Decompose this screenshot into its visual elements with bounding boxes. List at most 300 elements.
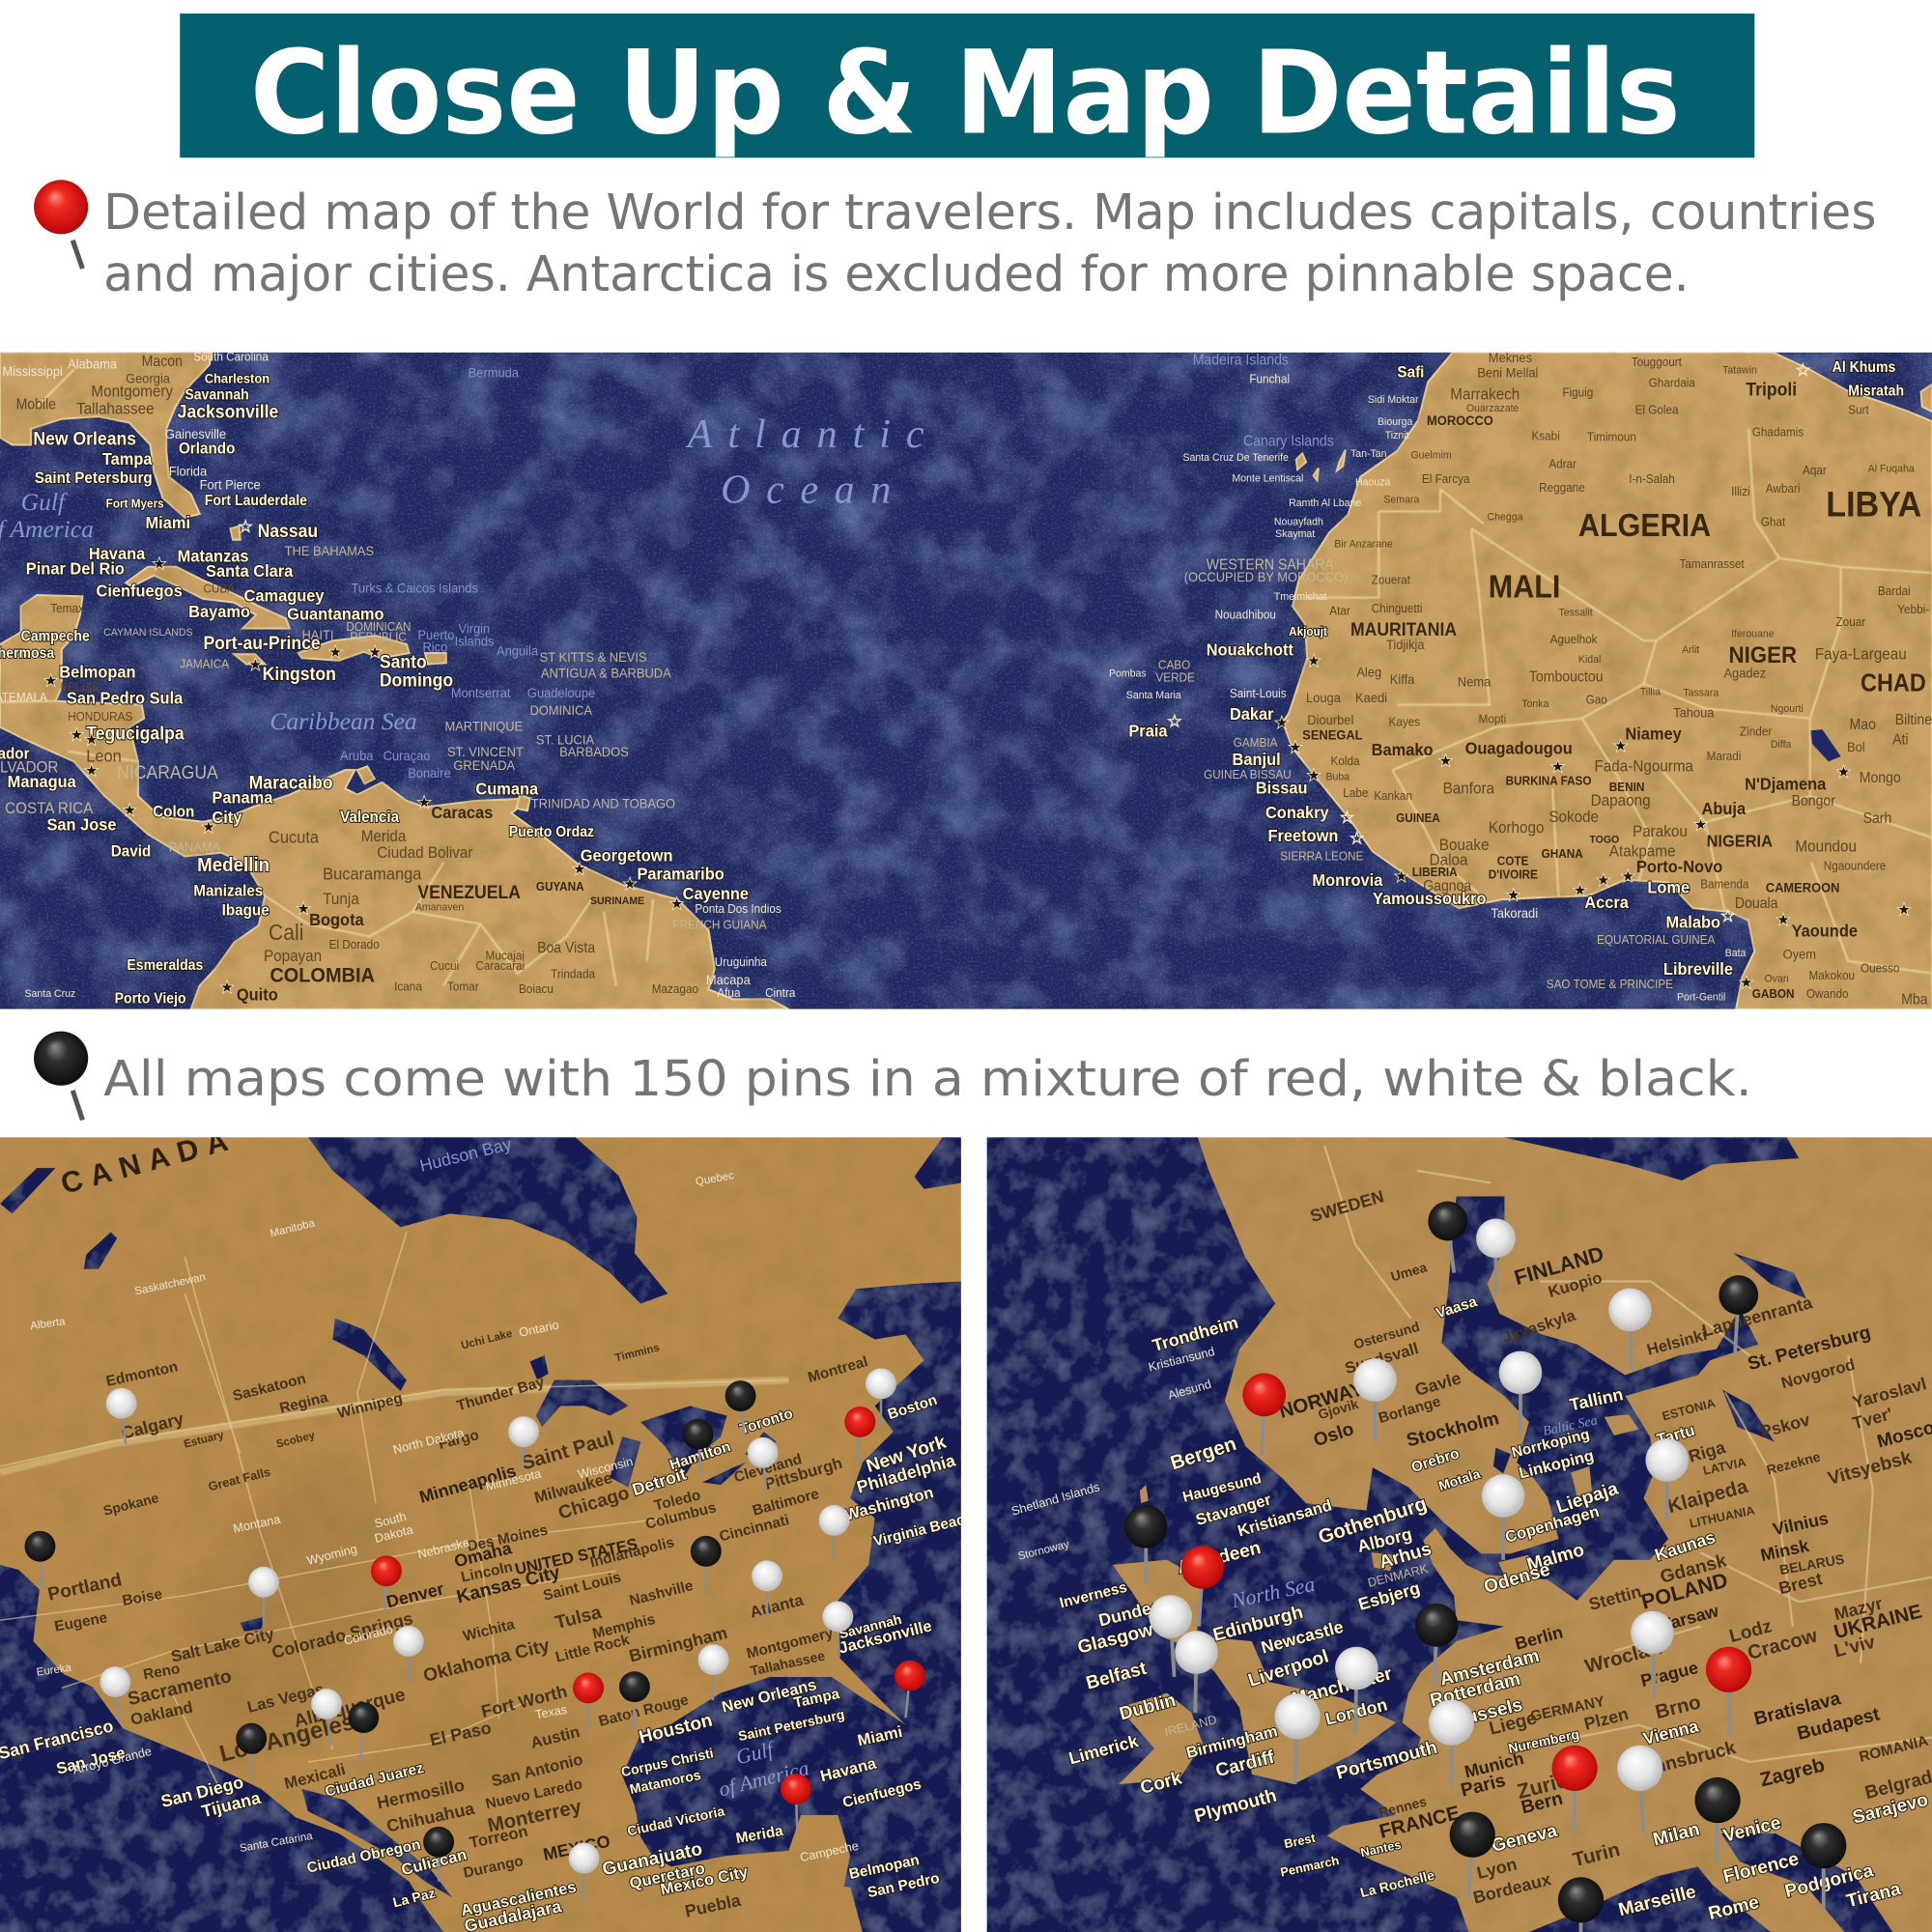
map labels: europe: FINLAND <box>1512 1241 1606 1290</box>
labels: caribbean and south america: Tallahassee <box>76 401 155 418</box>
labels: caribbean and south america: Porto Viejo <box>115 991 186 1007</box>
labels: west africa: Mopti <box>1479 712 1506 726</box>
pin: white <box>1476 1218 1516 1293</box>
map labels: north america: Alberta <box>30 1316 67 1332</box>
labels: west africa: MAURITANIA <box>1350 618 1457 639</box>
land tone <box>0 1137 961 1932</box>
map labels: europe: Rezekne <box>1765 1448 1822 1478</box>
capital stars: ★ <box>416 793 432 813</box>
capital stars: ☆ <box>1720 906 1736 926</box>
labels: caribbean and south america: ST. LUCIA <box>536 732 594 748</box>
map labels: north america: San Pedro <box>867 1870 941 1901</box>
map labels: europe: Vienna <box>1641 1716 1701 1748</box>
map labels: north america: Aguascalientes <box>459 1877 578 1919</box>
map labels: north america: Minnesota <box>484 1465 544 1493</box>
labels: west africa: Akjoujt <box>1289 625 1327 639</box>
map labels: europe: Manchester <box>1290 1663 1395 1710</box>
map labels: north america: Eureka <box>36 1662 72 1679</box>
pin: white <box>752 1560 782 1618</box>
map labels: north america: Cienfuegos <box>841 1776 923 1811</box>
pin: white <box>1175 1631 1218 1713</box>
map labels: europe: Penmarch <box>1279 1853 1340 1880</box>
labels: caribbean and south america: Afua <box>717 985 741 1000</box>
map labels: europe: Vaasa <box>1435 1293 1479 1322</box>
labels: west africa: Porto-Novo <box>1636 856 1722 876</box>
map labels: europe: LATVIA <box>1702 1455 1747 1478</box>
map labels: north america: Salt Lake City <box>169 1624 276 1666</box>
labels: caribbean and south america: Macapa <box>706 973 751 987</box>
labels: caribbean and south america: Tampa <box>102 448 153 469</box>
labels: caribbean and south america: HAITI <box>301 628 333 642</box>
labels: west africa: Bamenda <box>1700 877 1749 892</box>
capital stars: ★ <box>1394 867 1409 887</box>
map labels: north america: Albuquerque <box>292 1685 408 1732</box>
labels: caribbean and south america: Anguila <box>497 643 539 659</box>
labels: caribbean and south america: Uruguinha <box>715 955 767 969</box>
labels: caribbean and south america: Guadeloupe <box>527 685 595 700</box>
pin: black <box>25 1531 55 1587</box>
labels: west africa: EQUATORIAL GUINEA <box>1597 933 1716 947</box>
oceans and lakes <box>0 1137 961 1932</box>
labels: west africa: Marrakech <box>1450 386 1520 403</box>
labels: caribbean and south america: Fort Pierce <box>200 477 261 492</box>
labels: west africa: Tessalit <box>1559 607 1593 619</box>
map labels: north america: Milwaukee <box>532 1468 614 1507</box>
pin: red <box>371 1555 402 1613</box>
labels: west africa: Port-Gentil <box>1677 991 1725 1004</box>
pin: black <box>236 1723 267 1779</box>
labels: west africa: Aleg <box>1356 665 1381 679</box>
labels: caribbean and south america: Ocean <box>721 467 907 512</box>
capital stars: ★ <box>1306 766 1321 786</box>
map labels: europe: Prague <box>1638 1658 1700 1690</box>
capital stars: ★ <box>1739 973 1754 993</box>
capital stars: ★ <box>572 860 587 880</box>
labels: west africa: N'Djamena <box>1745 774 1827 794</box>
map labels: europe: Glasgow <box>1075 1620 1155 1659</box>
labels: caribbean and south america: Bayamo <box>188 601 250 621</box>
labels: caribbean and south america: Georgia <box>126 371 170 386</box>
labels: caribbean and south america: Caribbean Sea <box>270 707 417 735</box>
panel: europe photo <box>985 1137 1932 1932</box>
map labels: north america: Matamoros <box>628 1767 702 1797</box>
map labels: north america: Montgomery <box>745 1625 836 1662</box>
labels: caribbean and south america: Panama <box>212 787 273 808</box>
capital stars: ★ <box>201 817 216 838</box>
labels: west africa: WESTERN SAHARA <box>1207 557 1334 573</box>
map labels: north america: Fort Worth <box>479 1682 569 1721</box>
labels: caribbean and south america: Cumana <box>475 779 539 799</box>
map labels: europe: Klaipeda <box>1665 1476 1750 1518</box>
capital stars: ★ <box>122 800 137 820</box>
labels: caribbean and south america: Boa Vista <box>537 940 596 956</box>
map labels: europe: Plzen <box>1582 1704 1631 1734</box>
labels: caribbean and south america: San Jose <box>46 814 117 835</box>
map labels: europe: Riga <box>1687 1437 1728 1466</box>
pin: black <box>1428 1202 1467 1273</box>
map labels: europe: Yaroslavl <box>1851 1374 1928 1412</box>
labels: caribbean and south america: Turks & Caicos Islands <box>352 581 478 596</box>
map labels: north america: Manitoba <box>269 1217 317 1240</box>
pin: black <box>348 1702 379 1762</box>
labels: west africa: Awbari <box>1766 482 1800 496</box>
map labels: europe: Lodz <box>1727 1616 1774 1647</box>
map labels: north america: Timmins <box>614 1342 661 1364</box>
labels: west africa: Tassara <box>1683 687 1719 699</box>
map labels: europe: Esbjerg <box>1356 1578 1422 1614</box>
labels: west africa: Surt <box>1848 403 1869 417</box>
labels: west africa: Figuig <box>1562 385 1593 400</box>
map labels: europe: Geneva <box>1490 1821 1560 1857</box>
pin: white <box>248 1567 279 1627</box>
map labels: north america: Saskatchewan <box>133 1271 207 1297</box>
labels: caribbean and south america: Nassau <box>258 520 318 541</box>
pin: black <box>1450 1812 1495 1897</box>
labels: west africa: Canary Islands <box>1243 434 1334 450</box>
labels: caribbean and south america: Merida <box>361 829 406 845</box>
map labels: europe: NORWAY <box>1277 1378 1366 1423</box>
labels: west africa: Owando <box>1806 987 1849 1001</box>
capital stars: ★ <box>247 655 263 675</box>
pin: white <box>1645 1438 1689 1520</box>
labels: west africa: Ksabi <box>1531 429 1560 442</box>
labels: caribbean and south america: SURINAME <box>590 895 644 907</box>
map labels: north america: Calgary <box>120 1408 185 1443</box>
labels: west africa: VERDE <box>1155 670 1195 684</box>
map labels: europe: DENMARK <box>1366 1561 1430 1590</box>
labels: west africa: Ngourti <box>1771 703 1804 715</box>
labels: caribbean and south america: Miami <box>146 513 190 532</box>
map labels: north america: Tijuana <box>200 1788 264 1821</box>
map labels: europe: Sarajevo <box>1851 1790 1930 1829</box>
map labels: europe: BELARUS <box>1778 1551 1845 1577</box>
labels: west africa: BURKINA FASO <box>1506 774 1592 788</box>
map labels: europe: Inverness <box>1058 1579 1128 1611</box>
map labels: north america: Washington <box>842 1483 935 1524</box>
labels: caribbean and south america: Cienfuegos <box>96 581 183 601</box>
map labels: europe: L'viv <box>1833 1633 1878 1662</box>
pin: white <box>1617 1746 1662 1833</box>
labels: west africa: Bamako <box>1372 739 1434 759</box>
labels: west africa: Zinder <box>1740 724 1772 739</box>
state and province lines <box>0 1233 788 1793</box>
labels: west africa: Biltine <box>1895 713 1932 728</box>
map labels: europe: Brussels <box>1444 1694 1524 1733</box>
labels: west africa: SAO TOME & PRINCIPE <box>1547 978 1673 991</box>
labels: west africa: Malabo <box>1665 912 1720 932</box>
labels: caribbean and south america: Aruba <box>340 749 374 763</box>
labels: west africa: Daloa <box>1430 852 1468 869</box>
map labels: europe: Kristiansand <box>1236 1495 1334 1540</box>
map labels: europe: Kuopio <box>1546 1268 1605 1301</box>
map labels: europe: Novgorod <box>1779 1355 1857 1392</box>
map labels: europe: Aberdeen <box>1176 1538 1263 1578</box>
labels: west africa: I-n-Salah <box>1629 472 1675 486</box>
labels: west africa: Ghadamis <box>1752 425 1804 440</box>
pin: white <box>819 1505 849 1560</box>
labels: west africa: Ramth Al Lbane <box>1289 497 1361 509</box>
capital stars: ★ <box>1550 757 1566 778</box>
labels: west africa: SENEGAL <box>1302 727 1363 742</box>
map labels: north america: Oklahoma City <box>421 1635 553 1687</box>
pin: red <box>573 1673 604 1731</box>
capital stars: ★ <box>152 554 167 574</box>
labels: caribbean and south america: COLOMBIA <box>270 964 375 987</box>
labels: caribbean and south america: Virgin <box>458 621 490 637</box>
map labels: north america: La Paz <box>391 1885 437 1910</box>
labels: west africa <box>1109 351 1932 1009</box>
labels: west africa: Kayes <box>1389 715 1420 728</box>
pin: white <box>1482 1474 1524 1560</box>
labels: caribbean and south america: San Pedro Sula <box>67 688 184 707</box>
map labels: north america: Hermosillo <box>375 1776 467 1812</box>
map labels: europe: Minsk <box>1759 1536 1810 1565</box>
labels: west africa: Conakry <box>1265 802 1329 822</box>
intro text: Detailed map of the World for travelers. Map includes capitals, countries <box>103 185 1877 242</box>
labels: caribbean and south america: NICARAGUA <box>117 761 218 782</box>
labels: caribbean and south america: CUBA <box>203 582 236 596</box>
land: great britain and ireland <box>1113 1414 1638 1784</box>
labels: west africa: Bissau <box>1256 778 1308 798</box>
capital stars: ★ <box>1573 880 1588 900</box>
map labels: europe: Kaunas <box>1653 1527 1718 1565</box>
labels: west africa: Sidi Moktar <box>1368 394 1419 406</box>
map labels: north america: Toronto <box>738 1406 795 1437</box>
labels: caribbean and south america: DOMINICA <box>529 702 592 718</box>
map labels: north america: Ciudad Victoria <box>626 1803 726 1838</box>
map labels: europe: Lyon <box>1475 1854 1519 1883</box>
labels: caribbean and south america: Montgomery <box>91 384 173 401</box>
labels: west africa: Diffa <box>1771 739 1792 751</box>
labels: caribbean and south america: Bucaramanga <box>323 864 422 884</box>
pin: white <box>393 1626 424 1682</box>
map labels: north america: Little Rock <box>554 1632 632 1666</box>
map labels: europe: Ostersund <box>1351 1319 1421 1352</box>
map labels: north america: Belmopan <box>847 1852 921 1883</box>
map labels: north america: Pittsburgh <box>762 1454 844 1493</box>
labels: caribbean and south america: Gulf <box>21 488 69 516</box>
map labels: north america: Philadelphia <box>855 1450 958 1497</box>
map labels: north america: Hudson Bay <box>417 1134 514 1176</box>
map labels: europe: ROMANIA <box>1858 1733 1930 1766</box>
labels: west africa: CAMEROON <box>1766 880 1839 895</box>
map labels: europe: Limerick <box>1066 1731 1140 1768</box>
map labels: europe: Alesund <box>1166 1377 1213 1403</box>
labels: caribbean and south america: Icana <box>394 980 422 994</box>
map labels: north america: Ciudad Juarez <box>324 1760 426 1801</box>
labels: west africa: Sokode <box>1548 809 1599 826</box>
map labels: north america: Birmingham <box>627 1623 729 1666</box>
labels: west africa: Douala <box>1735 896 1778 912</box>
labels: west africa: Madeira Islands <box>1193 353 1289 369</box>
labels: west africa: GHANA <box>1542 846 1583 861</box>
capital stars: ★ <box>622 874 638 895</box>
map labels: europe: GERMANY <box>1529 1693 1606 1725</box>
labels: west africa: Ati <box>1892 732 1909 749</box>
labels: west africa: Mongo <box>1860 770 1901 786</box>
labels: west africa: Chegga <box>1488 511 1523 523</box>
map labels: north america: Portland <box>46 1570 124 1605</box>
map labels: europe: North Sea <box>1229 1573 1317 1613</box>
map labels: north america: Havana <box>818 1753 879 1785</box>
map labels: north america: San Antonio <box>490 1749 584 1790</box>
labels: caribbean and south america: Campeche <box>21 629 90 644</box>
map labels: europe: Shetland Islands <box>1009 1479 1101 1519</box>
map labels: europe: Helsinki <box>1645 1325 1709 1359</box>
map labels: europe: Plymouth <box>1192 1785 1279 1827</box>
labels: caribbean and south america: David <box>111 843 151 861</box>
panel: north america photo <box>0 1122 975 1932</box>
map labels: europe: Wroclaw <box>1582 1636 1666 1678</box>
map labels: north america: Santa Catarina <box>239 1831 314 1855</box>
labels: west africa: Diourbel <box>1307 713 1353 727</box>
labels: west africa: Bongor <box>1792 794 1835 810</box>
map labels: north america: South <box>373 1509 408 1531</box>
labels: west africa: NIGERIA <box>1707 831 1773 850</box>
labels: west africa: GABON <box>1752 987 1795 1001</box>
labels: west africa: Touggourt <box>1632 355 1683 369</box>
labels: west africa: Guelmim <box>1410 449 1452 462</box>
map labels: north america: Minneapolis <box>417 1461 519 1507</box>
labels: caribbean and south america: Fort Myers <box>106 497 164 511</box>
labels: west africa: Mao <box>1850 718 1876 733</box>
labels: caribbean and south america: Bogota <box>309 909 364 929</box>
labels: west africa: Sarh <box>1863 811 1891 827</box>
pin: red <box>1181 1546 1224 1627</box>
map labels: north america: Quebec <box>695 1170 735 1188</box>
map labels: europe: Gdansk <box>1659 1550 1729 1588</box>
map labels: europe: Brno <box>1653 1691 1703 1723</box>
capital stars: ★ <box>367 642 383 663</box>
labels: west africa: Nouakchott <box>1207 639 1293 660</box>
labels: west africa: Buba <box>1325 771 1350 783</box>
labels: caribbean and south america: Camaguey <box>244 585 325 606</box>
labels: west africa: Praia <box>1128 721 1168 741</box>
map labels: europe: Trondheim <box>1151 1313 1240 1355</box>
labels: caribbean and south america: Trindada <box>551 967 595 981</box>
map labels: north america: Saint Louis <box>542 1569 623 1605</box>
labels: caribbean and south america: Cintra <box>765 985 796 1000</box>
labels: west africa: MOROCCO <box>1427 413 1493 428</box>
labels: west africa: Saint-Louis <box>1230 686 1287 700</box>
labels: west africa: Tidjikja <box>1386 638 1425 652</box>
pin: white <box>698 1644 728 1700</box>
labels: caribbean and south america: Cayenne <box>683 883 749 903</box>
labels: west africa: Bardai <box>1878 584 1911 598</box>
labels: west africa: Kankan <box>1374 788 1412 803</box>
labels: west africa: CABO <box>1158 658 1190 672</box>
map labels: europe: Turin <box>1571 1839 1622 1871</box>
map labels: north america: Mexico City <box>659 1862 751 1899</box>
capital stars: ★ <box>84 761 99 781</box>
map labels: europe: Venice <box>1721 1813 1783 1847</box>
labels: west africa: Nouadhibou <box>1215 608 1276 621</box>
labels: caribbean and south america: Puerto Ordaz <box>509 825 594 840</box>
pin: black <box>423 1827 454 1882</box>
labels: caribbean and south america: Mazagao <box>652 982 698 996</box>
map labels: north america: Denver <box>384 1578 446 1611</box>
labels: west africa: MALI <box>1489 568 1560 605</box>
map labels: europe: Arhus <box>1377 1539 1434 1574</box>
seas and lakes <box>985 1137 1892 1932</box>
pin: white <box>1499 1351 1542 1432</box>
map labels: europe: Amsterdam <box>1437 1646 1542 1690</box>
labels: west africa: Ouesso <box>1861 961 1900 975</box>
labels: west africa: Biourga <box>1378 416 1413 428</box>
map labels: europe: Tirana <box>1844 1879 1903 1912</box>
labels: caribbean and south america: Matanzas <box>178 546 249 566</box>
map labels: north america: Memphis <box>591 1611 657 1642</box>
map labels: north america: Tallahassee <box>749 1648 827 1679</box>
labels: west africa: Atar <box>1329 604 1350 618</box>
labels: west africa: Meknes <box>1489 351 1532 365</box>
map labels: europe: Borlange <box>1377 1393 1442 1427</box>
capital stars: ★ <box>327 642 343 663</box>
labels: west africa: GAMBIA <box>1234 736 1278 750</box>
map labels: europe: Liepaja <box>1554 1479 1621 1518</box>
pin: white <box>1335 1647 1378 1734</box>
pin: white <box>1429 1700 1474 1786</box>
labels: caribbean and south america: Amanaven <box>415 901 464 914</box>
map labels: europe: Gjovik <box>1316 1396 1360 1422</box>
labels: west africa: NIGER <box>1729 641 1797 668</box>
labels: west africa: Bir Anzarane <box>1334 538 1393 550</box>
map labels: north america: Nashville <box>628 1577 695 1609</box>
map labels: europe: Stornoway <box>1017 1539 1070 1563</box>
map labels: europe: Stettin <box>1587 1581 1643 1614</box>
labels: west africa: El Farcya <box>1422 472 1470 486</box>
labels: caribbean and south america: FRENCH GUIANA <box>672 918 767 932</box>
map labels: europe: Baltic Sea <box>1542 1412 1599 1439</box>
labels: west africa: SIERRA LEONE <box>1280 849 1363 863</box>
map labels: europe: Alborg <box>1355 1524 1414 1556</box>
capital stars: ★ <box>1836 762 1852 782</box>
map labels: europe: Gavle <box>1412 1368 1463 1400</box>
map labels: north america: Wichita <box>462 1616 517 1645</box>
labels: west africa: LIBYA <box>1826 484 1921 525</box>
labels: caribbean and south america: DOMINICAN <box>346 620 412 634</box>
labels: caribbean and south america: Orlando <box>179 440 236 458</box>
map labels: europe: Cork <box>1138 1768 1184 1799</box>
map labels: europe: Dundee <box>1096 1596 1163 1631</box>
map labels: north america: Thunder Bay <box>455 1374 547 1414</box>
map labels: north america: North Dakota <box>391 1425 467 1457</box>
labels: west africa: Yaounde <box>1792 921 1858 941</box>
map labels: europe: Liverpool <box>1246 1646 1331 1691</box>
map labels: north america: Merida <box>734 1823 784 1847</box>
map labels: north america: Baton Rouge <box>597 1691 691 1730</box>
labels: caribbean and south america: Alabama <box>68 356 118 371</box>
capital stars: ★ <box>1506 885 1521 905</box>
map labels: europe: St. Petersburg <box>1746 1322 1873 1375</box>
map labels: europe: IRELAND <box>1163 1712 1218 1739</box>
pin: black <box>1719 1275 1758 1355</box>
map labels: north america: Montreal <box>806 1353 869 1386</box>
map labels: north america: MEXICO <box>541 1832 612 1864</box>
labels: caribbean and south america: Florida <box>169 464 208 478</box>
pin: red <box>844 1406 875 1463</box>
pin: black <box>725 1380 756 1436</box>
lighter mountain ridges and borders <box>1324 1146 1932 1762</box>
pin: white <box>1149 1595 1192 1677</box>
map labels: north america: Des Moines <box>466 1521 550 1555</box>
labels: caribbean and south america: JAMAICA <box>180 657 230 670</box>
labels: west africa: ALGERIA <box>1578 507 1711 543</box>
labels: west africa: Ouagadougou <box>1465 738 1573 758</box>
labels: west africa: Fada-Ngourma <box>1595 758 1693 776</box>
map labels: north america: Edmonton <box>104 1359 180 1390</box>
map labels: europe: Bordeaux <box>1471 1869 1553 1908</box>
